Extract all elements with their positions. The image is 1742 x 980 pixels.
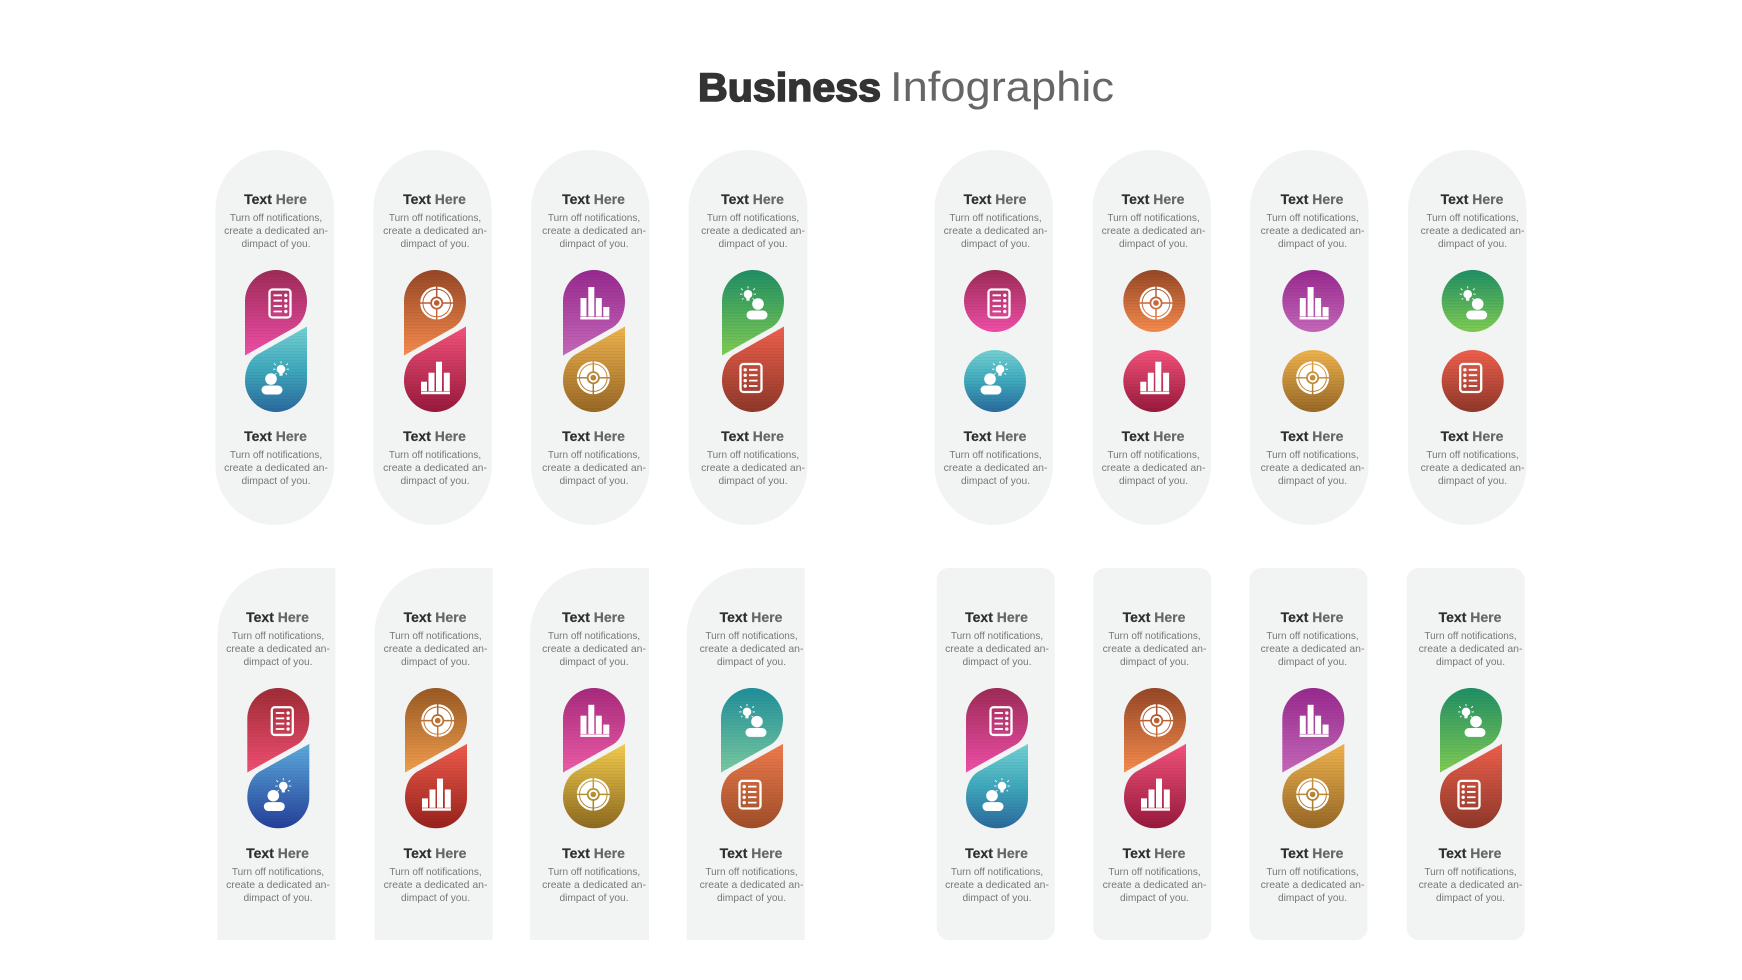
text block bottom: dimpact of you.: [961, 476, 1030, 487]
text block top: dimpact of you.: [962, 657, 1032, 668]
card background: [1250, 568, 1368, 940]
bottom segment with target icon: [563, 744, 625, 828]
panel: row 2 right column 4: [1407, 568, 1525, 940]
top segment with person icon: [722, 270, 784, 356]
top segment with document icon: [247, 688, 309, 772]
text block top: dimpact of you.: [559, 239, 629, 250]
text block bottom: dimpact of you.: [1438, 476, 1507, 487]
text block top: [945, 609, 1049, 668]
text block top: Text Here: [1281, 609, 1344, 625]
text block bottom: Turn off notifications,: [1266, 450, 1359, 461]
text block bottom: create a dedicated an-: [224, 463, 328, 474]
text block top: create a dedicated an-: [1103, 644, 1207, 655]
text block top: dimpact of you.: [961, 239, 1030, 250]
text block bottom: dimpact of you.: [1436, 893, 1505, 904]
text block top: Text Here: [964, 191, 1027, 207]
bottom segment with document icon: [1440, 744, 1502, 828]
text block bottom: Text Here: [720, 845, 783, 861]
pill background: [216, 150, 334, 525]
text block bottom: Text Here: [1122, 428, 1185, 444]
text block top: Turn off notifications,: [389, 631, 482, 642]
text block top: Turn off notifications,: [1266, 213, 1359, 224]
text block bottom: [1261, 428, 1365, 487]
panel: row 2 left column 1: [218, 568, 336, 940]
text block bottom: create a dedicated an-: [700, 880, 804, 891]
text block bottom: Text Here: [721, 428, 784, 444]
text block top: dimpact of you.: [1436, 657, 1505, 668]
text block top: Text Here: [244, 191, 307, 207]
text block top: [1102, 191, 1206, 250]
panel: row 1 left column 2: [373, 150, 492, 525]
text block top: create a dedicated an-: [1261, 644, 1365, 655]
text block top: [224, 191, 328, 250]
panel: row 2 right column 1: [937, 568, 1055, 940]
text block bottom: dimpact of you.: [1119, 476, 1188, 487]
text block bottom: Turn off notifications,: [705, 867, 798, 878]
text block bottom: dimpact of you.: [241, 476, 311, 487]
text block bottom: dimpact of you.: [1278, 893, 1347, 904]
text block top: create a dedicated an-: [944, 226, 1048, 237]
text block bottom: [542, 428, 646, 487]
pill background: [373, 150, 492, 525]
text block bottom: dimpact of you.: [962, 893, 1032, 904]
text block top: [700, 609, 804, 668]
text block top: Text Here: [562, 191, 625, 207]
text block top: Turn off notifications,: [951, 631, 1043, 642]
text block top: Text Here: [965, 609, 1028, 625]
text block top: Text Here: [403, 191, 466, 207]
pill background: [531, 150, 650, 525]
text block top: Text Here: [404, 609, 467, 625]
text block bottom: Turn off notifications,: [232, 867, 324, 878]
text block top: dimpact of you.: [1278, 239, 1347, 250]
text block top: create a dedicated an-: [701, 226, 805, 237]
text block bottom: [1261, 845, 1365, 904]
text block bottom: create a dedicated an-: [944, 463, 1048, 474]
text block bottom: dimpact of you.: [400, 476, 470, 487]
text block bottom: dimpact of you.: [718, 476, 788, 487]
text block top: Text Here: [721, 191, 784, 207]
text block bottom: Turn off notifications,: [230, 450, 322, 461]
text block top: [542, 609, 646, 668]
pill background: [1250, 150, 1368, 525]
icon badge: [245, 270, 307, 412]
text block top: Turn off notifications,: [949, 213, 1042, 224]
text block top: [1261, 191, 1365, 250]
text block top: [1419, 609, 1523, 668]
text block bottom: dimpact of you.: [1120, 893, 1189, 904]
panel: row 1 left column 4: [688, 150, 808, 525]
bottom segment with target icon: [1282, 744, 1344, 828]
text block top: [1103, 609, 1207, 668]
bottom circle with person icon: [964, 350, 1026, 412]
text block bottom: Text Here: [964, 428, 1027, 444]
pill background: [1092, 150, 1211, 525]
text block top: create a dedicated an-: [226, 644, 330, 655]
panel: row 1 right column 1: [934, 150, 1053, 525]
text block bottom: [1103, 845, 1207, 904]
text block top: Turn off notifications,: [1107, 213, 1200, 224]
title: Business: [698, 66, 881, 110]
text block bottom: Text Here: [1439, 845, 1502, 861]
tab background: [530, 568, 649, 940]
card background: [1407, 568, 1525, 940]
icon pair: [964, 270, 1026, 412]
text block bottom: dimpact of you.: [717, 893, 786, 904]
text block bottom: [944, 428, 1048, 487]
text block bottom: Turn off notifications,: [389, 867, 482, 878]
text block top: Turn off notifications,: [230, 213, 322, 224]
text block top: create a dedicated an-: [542, 226, 646, 237]
text block bottom: [226, 845, 330, 904]
text block top: create a dedicated an-: [1419, 644, 1523, 655]
icon badge: [1282, 688, 1344, 828]
text block bottom: create a dedicated an-: [1419, 880, 1523, 891]
top segment with target icon: [405, 688, 467, 772]
top circle with person icon: [1442, 270, 1504, 332]
top segment with target icon: [404, 270, 466, 356]
panel: row 2 left column 3: [530, 568, 649, 940]
text block top: Turn off notifications,: [1108, 631, 1201, 642]
icon badge: [722, 270, 784, 412]
text block bottom: dimpact of you.: [559, 893, 629, 904]
text block bottom: Text Here: [404, 845, 467, 861]
text block top: dimpact of you.: [1278, 657, 1347, 668]
text block bottom: create a dedicated an-: [1103, 880, 1207, 891]
text block bottom: Turn off notifications,: [951, 867, 1043, 878]
bottom segment with person icon: [245, 326, 307, 412]
text block bottom: dimpact of you.: [1278, 476, 1347, 487]
text block bottom: Turn off notifications,: [1108, 867, 1201, 878]
text block bottom: dimpact of you.: [559, 476, 629, 487]
text block top: Turn off notifications,: [705, 631, 798, 642]
icon badge: [247, 688, 309, 828]
text block bottom: [1102, 428, 1206, 487]
icon pair: [1123, 270, 1185, 412]
text block top: dimpact of you.: [1119, 239, 1188, 250]
text block top: Turn off notifications,: [1426, 213, 1519, 224]
top circle with document icon: [964, 270, 1026, 332]
text block top: [226, 609, 330, 668]
panel: row 1 right column 4: [1408, 150, 1526, 525]
top segment with document icon: [245, 270, 307, 356]
pill background: [688, 150, 808, 525]
text block top: create a dedicated an-: [1421, 226, 1525, 237]
text block top: dimpact of you.: [559, 657, 629, 668]
tab background: [374, 568, 492, 940]
icon badge: [405, 688, 467, 828]
text block top: [1261, 609, 1365, 668]
top segment with person icon: [721, 688, 783, 772]
bottom circle with target icon: [1282, 350, 1344, 412]
icon badge: [563, 688, 625, 828]
text block top: dimpact of you.: [718, 239, 788, 250]
text block top: create a dedicated an-: [700, 644, 804, 655]
text block top: Text Here: [1441, 191, 1504, 207]
top segment with bars icon: [563, 688, 625, 772]
text block bottom: Text Here: [403, 428, 466, 444]
text block bottom: Turn off notifications,: [707, 450, 799, 461]
bottom segment with document icon: [721, 744, 783, 828]
bottom segment with person icon: [247, 744, 309, 828]
text block top: Text Here: [1439, 609, 1502, 625]
text block bottom: create a dedicated an-: [542, 463, 646, 474]
text block bottom: [224, 428, 328, 487]
card background: [1093, 568, 1211, 940]
text block bottom: Turn off notifications,: [389, 450, 481, 461]
text block top: dimpact of you.: [401, 657, 470, 668]
text block top: create a dedicated an-: [542, 644, 646, 655]
text block bottom: create a dedicated an-: [383, 463, 487, 474]
text block bottom: Text Here: [562, 845, 625, 861]
text block top: [384, 609, 488, 668]
panel: row 2 right column 2: [1093, 568, 1211, 940]
bottom segment with bars icon: [1124, 744, 1186, 828]
tab background: [218, 568, 336, 940]
text block bottom: [384, 845, 488, 904]
panel: row 2 left column 2: [374, 568, 492, 940]
text block top: create a dedicated an-: [384, 644, 488, 655]
text block top: Turn off notifications,: [707, 213, 799, 224]
icon pair: [1442, 270, 1504, 412]
top circle with bars icon: [1282, 270, 1344, 332]
text block top: Turn off notifications,: [389, 213, 481, 224]
icon pair: [1282, 270, 1344, 412]
card background: [937, 568, 1055, 940]
text block top: Turn off notifications,: [1424, 631, 1517, 642]
text block top: dimpact of you.: [400, 239, 470, 250]
text block bottom: [945, 845, 1049, 904]
text block bottom: create a dedicated an-: [1102, 463, 1206, 474]
text block top: dimpact of you.: [243, 657, 313, 668]
text block bottom: [701, 428, 805, 487]
text block top: Text Here: [720, 609, 783, 625]
text block bottom: create a dedicated an-: [384, 880, 488, 891]
text block top: [701, 191, 805, 250]
text block bottom: Text Here: [1441, 428, 1504, 444]
panel: row 2 right column 3: [1250, 568, 1368, 940]
bottom segment with document icon: [722, 326, 784, 412]
text block top: Text Here: [562, 609, 625, 625]
text block bottom: create a dedicated an-: [226, 880, 330, 891]
bottom segment with person icon: [966, 744, 1028, 828]
text block top: create a dedicated an-: [1261, 226, 1365, 237]
text block top: [944, 191, 1048, 250]
text block bottom: [542, 845, 646, 904]
text block top: create a dedicated an-: [1102, 226, 1206, 237]
text block top: [383, 191, 487, 250]
text block bottom: Text Here: [1281, 428, 1344, 444]
text block bottom: Turn off notifications,: [548, 867, 640, 878]
text block bottom: dimpact of you.: [243, 893, 313, 904]
tab background: [687, 568, 805, 940]
icon badge: [1440, 688, 1502, 828]
text block top: dimpact of you.: [1438, 239, 1507, 250]
bottom segment with bars icon: [404, 326, 466, 412]
text block bottom: [700, 845, 804, 904]
text block bottom: Text Here: [244, 428, 307, 444]
text block bottom: Text Here: [246, 845, 309, 861]
text block bottom: Turn off notifications,: [548, 450, 640, 461]
icon badge: [563, 270, 625, 412]
text block top: dimpact of you.: [1120, 657, 1189, 668]
panel: row 1 left column 1: [216, 150, 334, 525]
text block top: Turn off notifications,: [232, 631, 324, 642]
panel: row 2 left column 4: [687, 568, 805, 940]
text block bottom: create a dedicated an-: [1261, 463, 1365, 474]
top segment with person icon: [1440, 688, 1502, 772]
pill background: [934, 150, 1053, 525]
panel: row 1 right column 2: [1092, 150, 1211, 525]
icon badge: [1124, 688, 1186, 828]
text block bottom: Turn off notifications,: [1424, 867, 1517, 878]
panel: row 1 left column 3: [531, 150, 650, 525]
bottom segment with bars icon: [405, 744, 467, 828]
panel: row 1 right column 3: [1250, 150, 1368, 525]
text block top: Turn off notifications,: [548, 213, 640, 224]
text block top: Text Here: [246, 609, 309, 625]
bottom segment with target icon: [563, 326, 625, 412]
icon badge: [404, 270, 466, 412]
text block bottom: [1419, 845, 1523, 904]
title: Infographic: [890, 63, 1114, 110]
text block bottom: Turn off notifications,: [949, 450, 1042, 461]
text block bottom: [383, 428, 487, 487]
text block top: Text Here: [1123, 609, 1186, 625]
pill background: [1408, 150, 1526, 525]
icon badge: [721, 688, 783, 828]
text block bottom: [1421, 428, 1525, 487]
top segment with document icon: [966, 688, 1028, 772]
text block bottom: create a dedicated an-: [542, 880, 646, 891]
text block top: Turn off notifications,: [548, 631, 640, 642]
text block top: Text Here: [1281, 191, 1344, 207]
top circle with target icon: [1123, 270, 1185, 332]
text block top: create a dedicated an-: [383, 226, 487, 237]
text block bottom: create a dedicated an-: [1421, 463, 1525, 474]
text block bottom: Turn off notifications,: [1107, 450, 1200, 461]
text block top: [1421, 191, 1525, 250]
top segment with bars icon: [1282, 688, 1344, 772]
text block bottom: create a dedicated an-: [945, 880, 1049, 891]
text block top: create a dedicated an-: [945, 644, 1049, 655]
top segment with target icon: [1124, 688, 1186, 772]
text block top: create a dedicated an-: [224, 226, 328, 237]
text block top: Turn off notifications,: [1266, 631, 1359, 642]
top segment with bars icon: [563, 270, 625, 356]
icon badge: [966, 688, 1028, 828]
text block bottom: Turn off notifications,: [1266, 867, 1359, 878]
text block bottom: Text Here: [965, 845, 1028, 861]
text block top: [542, 191, 646, 250]
bottom circle with document icon: [1442, 350, 1504, 412]
text block top: dimpact of you.: [241, 239, 311, 250]
text block bottom: Text Here: [1281, 845, 1344, 861]
text block bottom: Text Here: [562, 428, 625, 444]
text block bottom: Turn off notifications,: [1426, 450, 1519, 461]
title: [698, 63, 1114, 110]
text block top: Text Here: [1122, 191, 1185, 207]
text block bottom: Text Here: [1123, 845, 1186, 861]
text block bottom: create a dedicated an-: [701, 463, 805, 474]
text block bottom: create a dedicated an-: [1261, 880, 1365, 891]
bottom circle with bars icon: [1123, 350, 1185, 412]
text block bottom: dimpact of you.: [401, 893, 470, 904]
text block top: dimpact of you.: [717, 657, 786, 668]
